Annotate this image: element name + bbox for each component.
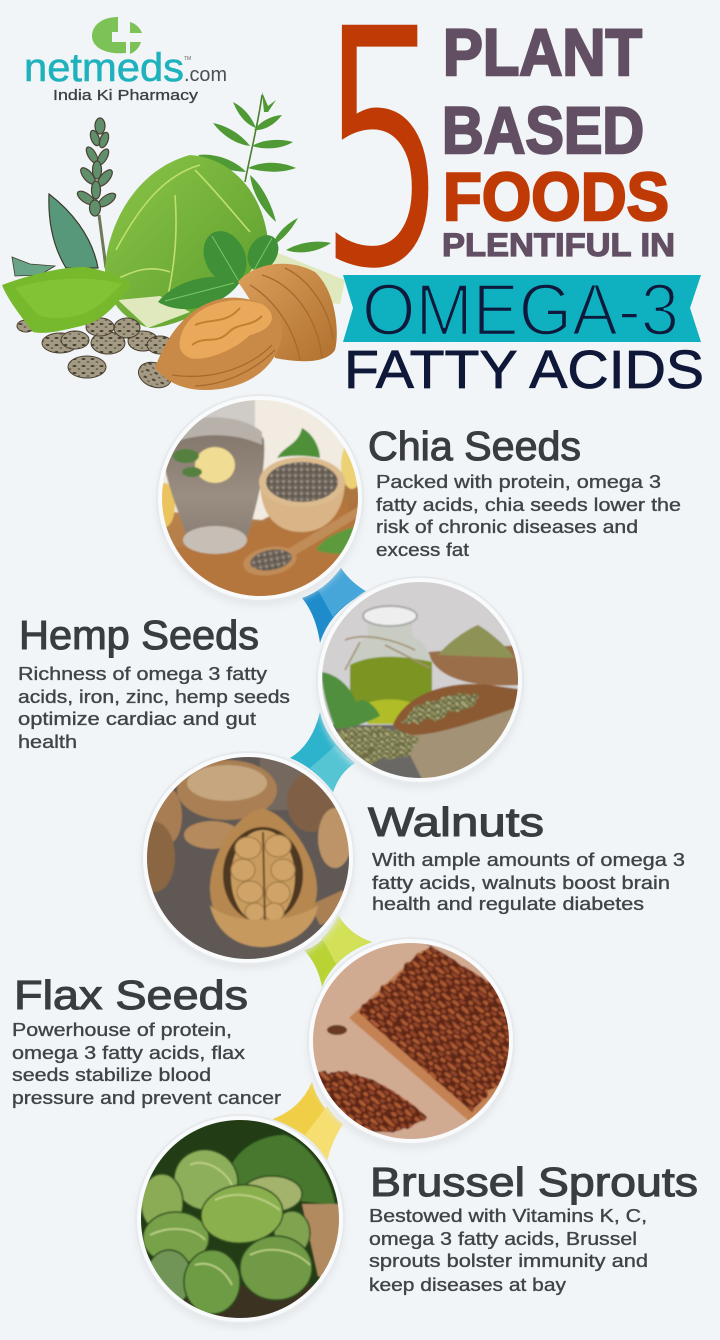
- serrated dark leaf: [49, 194, 98, 268]
- banner text: OMEGA-3: [362, 270, 679, 351]
- circle photo: chia seeds: [156, 394, 364, 606]
- heading: Hemp Seeds: [19, 612, 259, 658]
- glass jar: [350, 624, 432, 665]
- description: health: [18, 732, 77, 752]
- connector: blue: [302, 568, 367, 643]
- description: optimize cardiac and gut: [18, 709, 256, 729]
- heading: Chia Seeds: [368, 423, 581, 469]
- wooden scoop: [393, 684, 525, 735]
- shell ridges: [172, 345, 275, 386]
- aloe highlight: [15, 279, 122, 318]
- trademark: TM: [184, 56, 191, 62]
- wordmark suffix: .com: [184, 64, 227, 86]
- description: fatty acids, walnuts boost brain: [372, 873, 670, 893]
- photo frame: [136, 1120, 344, 1328]
- cabbage pale base: [118, 296, 190, 328]
- aloe leaf: [2, 267, 131, 333]
- glass of chia water: [165, 434, 266, 538]
- photo content: [162, 400, 358, 596]
- text block: brussel sprouts: [369, 1159, 698, 1295]
- photo content: [147, 757, 349, 959]
- text block: chia seeds: [368, 423, 681, 560]
- wordmark: netmeds: [24, 46, 184, 90]
- illustration: plants and walnuts: [2, 92, 345, 392]
- description: seeds stabilize blood: [12, 1065, 211, 1085]
- photo frame: [157, 400, 363, 606]
- subtitle: FATTY ACIDS: [344, 340, 704, 400]
- description: risk of chronic diseases and: [376, 517, 638, 537]
- lemon slice: [195, 447, 235, 483]
- tagline: India Ki Pharmacy: [53, 88, 199, 104]
- description: pressure and prevent cancer: [12, 1088, 281, 1108]
- description: Packed with protein, omega 3: [376, 472, 661, 492]
- walnut ridges: [250, 268, 333, 360]
- connector: teal: [290, 712, 355, 792]
- photo content: [322, 582, 518, 778]
- hemp leaves: [322, 672, 380, 728]
- title: [318, 0, 704, 400]
- small back leaf: [12, 257, 55, 276]
- description: [369, 1206, 648, 1295]
- circle photo: walnuts: [135, 750, 360, 970]
- wooden spoon: [290, 512, 358, 553]
- cabbage: [105, 155, 268, 328]
- seeds on tray: [318, 945, 518, 1132]
- pale cabbage stem right: [236, 236, 345, 304]
- heading: Brussel Sprouts: [370, 1159, 698, 1205]
- photo frame: [308, 943, 514, 1149]
- circle photo: brussel sprouts: [135, 1115, 345, 1328]
- description: [12, 1020, 281, 1108]
- mint leaves: [158, 224, 285, 309]
- background leaves: [225, 1135, 335, 1205]
- spilled seeds pile: [318, 1072, 425, 1132]
- photo content: [141, 1120, 339, 1318]
- cabbage veins: [115, 165, 250, 322]
- description: Bestowed with Vitamins K, C,: [369, 1206, 647, 1226]
- heading: Walnuts: [368, 799, 544, 845]
- spilled seeds: [335, 726, 420, 763]
- tall herb spike: [75, 118, 118, 268]
- heading: Flax Seeds: [14, 972, 248, 1018]
- photo content: [313, 943, 509, 1139]
- description: [372, 850, 685, 914]
- kernel lobes: [231, 835, 295, 921]
- central walnut: [209, 808, 318, 920]
- mint leaves: [173, 449, 199, 463]
- description: health and regulate diabetes: [372, 894, 644, 914]
- kernel wrinkles: [192, 308, 262, 345]
- description: With ample amounts of omega 3: [372, 850, 685, 870]
- description: Powerhouse of protein,: [12, 1020, 232, 1040]
- seeds: [17, 318, 175, 392]
- wooden bowl: [260, 482, 345, 532]
- title line: plentiful in: PLENTIFUL IN: [442, 227, 675, 263]
- description: [376, 472, 681, 560]
- description: acids, iron, zinc, hemp seeds: [18, 687, 290, 707]
- description: fatty acids, chia seeds lower the: [376, 495, 681, 515]
- circle photo: flax seeds: [305, 935, 520, 1150]
- logo: netmeds: [24, 17, 227, 104]
- description: keep diseases at bay: [369, 1275, 566, 1295]
- photo frame: [142, 757, 354, 969]
- back walnut: [238, 264, 337, 361]
- burlap cloth: [409, 707, 514, 778]
- description: sprouts bolster immunity and: [369, 1251, 648, 1271]
- ribbon banner: [343, 275, 701, 342]
- icon: medical cross in circle: [92, 17, 142, 54]
- wooden tray: [349, 950, 515, 1122]
- text block: hemp seeds: [18, 612, 290, 752]
- photo frame: [317, 582, 523, 788]
- description: [18, 664, 290, 752]
- title line: foods: FOODS: [443, 159, 669, 235]
- lemon wedges: [162, 482, 176, 528]
- circle photo: hemp seeds: [315, 575, 525, 788]
- connector: yellow: [270, 1082, 343, 1161]
- wooden bowl with powder: [428, 645, 520, 686]
- wooden board: [302, 1204, 340, 1285]
- sprouts: [141, 1141, 312, 1314]
- text block: walnuts: [368, 799, 685, 914]
- description: omega 3 fatty acids, Brussel: [369, 1229, 637, 1249]
- sprout leaf lines: [150, 1163, 310, 1285]
- description: Richness of omega 3 fatty: [18, 664, 267, 684]
- background shells: [177, 760, 277, 820]
- walnut kernel: [179, 300, 272, 359]
- title line: plant: PLANT: [443, 15, 642, 89]
- title line: based: BASED: [442, 93, 644, 167]
- open walnut shell: [155, 298, 282, 390]
- text block: flax seeds: [12, 972, 281, 1108]
- description: excess fat: [376, 540, 469, 560]
- fern sprig: [198, 92, 331, 252]
- description: omega 3 fatty acids, flax: [12, 1043, 245, 1063]
- connector: lime: [304, 915, 372, 987]
